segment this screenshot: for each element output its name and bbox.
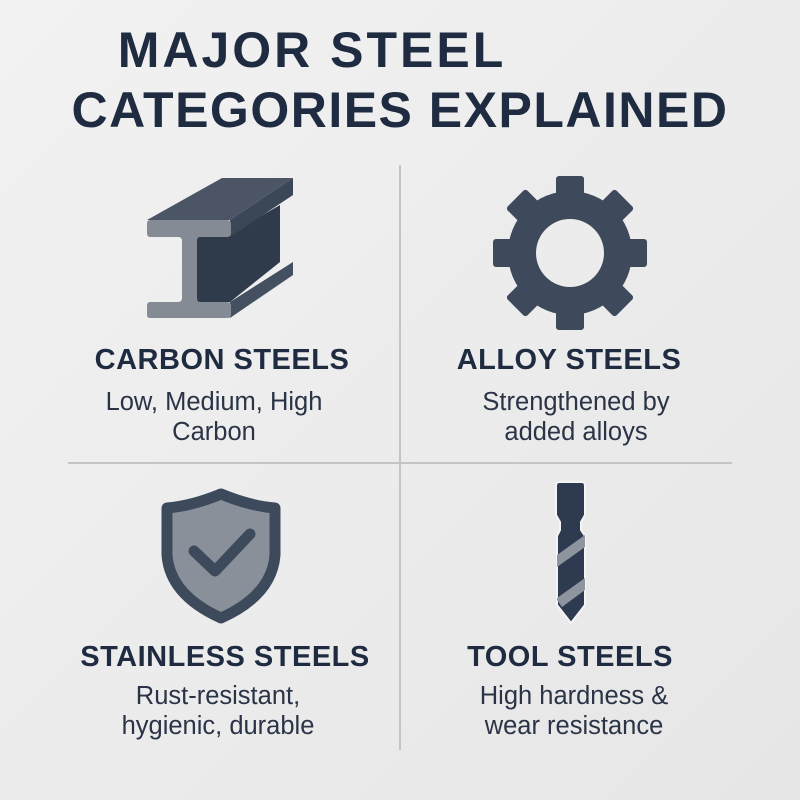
heading: carbon steels: CARBON STEELS xyxy=(95,344,349,376)
heading: alloy steels: ALLOY STEELS xyxy=(457,344,681,376)
text: carbon xyxy=(106,388,322,446)
text: alloy: added alloys xyxy=(504,418,648,446)
heading: stainless steels: STAINLESS STEELS xyxy=(80,641,370,673)
heading: tool steels: TOOL STEELS xyxy=(467,641,673,673)
icon: I-beam xyxy=(147,178,293,318)
title: CATEGORIES EXPLAINED xyxy=(72,82,728,138)
text: tool: High hardness & xyxy=(480,682,668,710)
icon: drill bit xyxy=(556,482,585,623)
title: MAJOR STEEL xyxy=(118,22,506,78)
icon: gear xyxy=(493,176,647,330)
text: alloy: Strengthened by xyxy=(482,388,670,416)
text: tool xyxy=(480,682,668,740)
title xyxy=(72,22,728,138)
text: stainless: Rust-resistant, xyxy=(136,682,300,710)
text: stainless xyxy=(122,682,314,740)
text: stainless: hygienic, durable xyxy=(122,712,314,740)
text: carbon: Carbon xyxy=(172,418,256,446)
text: carbon: Low, Medium, High xyxy=(106,388,322,416)
text: tool: wear resistance xyxy=(485,712,663,740)
icon: shield xyxy=(167,494,275,618)
text: alloy xyxy=(482,388,670,446)
